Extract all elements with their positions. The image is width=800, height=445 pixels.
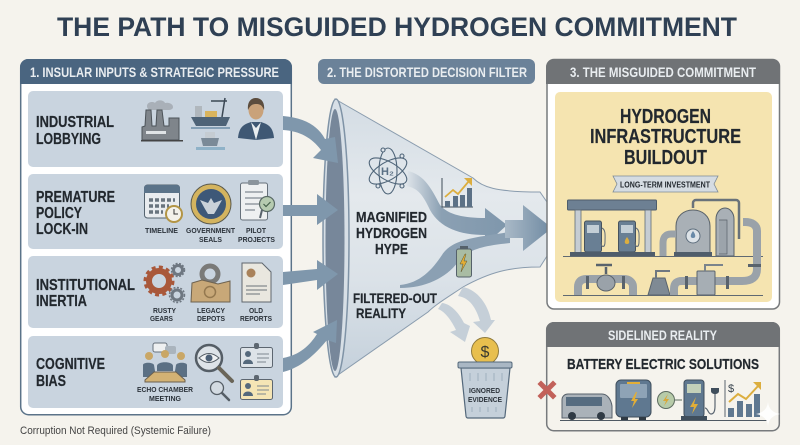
footer note: Corruption Not Required (Systemic Failure): [20, 425, 211, 437]
row: industrial lobbying: INDUSTRIAL: [36, 114, 114, 131]
panel: insular inputs: [20, 59, 292, 415]
icon: hydrogen atom: H₂: [381, 166, 394, 178]
label: filtered-out reality: FILTERED-OUT: [353, 290, 437, 306]
label: rusty gears: GEARS: [150, 314, 173, 323]
header: decision filter: 2. THE DISTORTED DECISION FILTER: [327, 64, 527, 80]
icon: legacy depot: [191, 266, 230, 302]
heading: battery electric solutions: BATTERY ELECTRIC SOLUTIONS: [567, 356, 759, 373]
row: cognitive bias: BIAS: [36, 373, 66, 390]
panel 1 header: 1. INSULAR INPUTS & STRATEGIC PRESSURE: [30, 64, 279, 80]
label: rusty gears: RUSTY: [153, 306, 176, 315]
row: premature policy lock-in: [28, 174, 283, 249]
row: premature policy lock-in: POLICY: [36, 205, 82, 222]
funnel mouth: [323, 99, 349, 377]
icon: businessman: [238, 98, 274, 140]
icon: bus side: [562, 394, 612, 420]
row: industrial lobbying: [28, 91, 283, 167]
icon: charging station: [681, 380, 719, 420]
icon: battery: [456, 246, 472, 277]
icon: calendar: [144, 185, 182, 222]
label: old reports: OLD: [249, 306, 264, 315]
label: filtered-out reality: REALITY: [356, 305, 407, 321]
icon: cargo ship: [191, 98, 230, 128]
panel 1 header: [20, 59, 292, 84]
icon: rising chart: [442, 178, 473, 207]
row: industrial lobbying: LOBBYING: [36, 131, 101, 148]
banner: long-term investment: LONG-TERM INVESTMENT: [620, 180, 710, 190]
icon: rusty gears: [145, 264, 184, 302]
icon: small magnifier: [210, 382, 229, 400]
ground line lower: [563, 294, 763, 296]
row: institutional inertia: INSTITUTIONAL: [36, 277, 135, 294]
banner: long-term investment: [613, 176, 718, 192]
icon: ignored evidence bin: EVIDENCE: [468, 395, 502, 404]
icon: red cross: [541, 384, 553, 396]
icon: ignored evidence bin: IGNORED: [469, 386, 501, 395]
icon: storage tanks: [663, 200, 739, 256]
icon: dollar coin: [472, 338, 498, 364]
ground line upper: [563, 256, 763, 258]
row: institutional inertia: [28, 256, 283, 328]
icon: sparkle: [756, 402, 780, 426]
label: magnified hydrogen hype: HYPE: [375, 241, 408, 258]
arrow: industrial lobbying to funnel: [283, 116, 338, 163]
label: echo chamber meeting: ECHO CHAMBER: [137, 385, 194, 394]
icon: factory: [141, 100, 183, 142]
arrow: inertia to funnel: [283, 260, 338, 290]
arrow: hype stream lower: [400, 232, 510, 288]
row: cognitive bias: COGNITIVE: [36, 356, 105, 373]
panel 3 header: 3. THE MISGUIDED COMMITMENT: [570, 64, 756, 80]
row: premature policy lock-in: PREMATURE: [36, 189, 115, 206]
row: institutional inertia: INERTIA: [36, 293, 87, 310]
yellow infrastructure card: INFRASTRUCTURE: [590, 126, 741, 148]
header: decision filter: [318, 59, 535, 84]
label: pilot projects: PROJECTS: [238, 235, 275, 244]
icon: government seal: [191, 184, 231, 224]
label: magnified hydrogen hype: MAGNIFIED: [356, 209, 427, 226]
label: legacy depots: LEGACY: [197, 306, 225, 315]
label: pilot projects: PILOT: [246, 226, 266, 235]
icon: old report: [242, 263, 271, 302]
arrow: filtered out left: [438, 303, 470, 342]
arrow: output head: [505, 205, 552, 251]
panel: misguided commitment: [546, 59, 780, 309]
panel 3 header: [546, 59, 780, 84]
icon: dollar coin: $: [481, 344, 490, 361]
arrow: filtered out right: [458, 287, 495, 333]
label: old reports: REPORTS: [240, 314, 272, 323]
icon: magnifier with eye: [196, 345, 232, 381]
row: premature policy lock-in: LOCK-IN: [36, 221, 88, 238]
icon: id badge: [240, 343, 272, 368]
sidelined header: [546, 322, 780, 347]
label: legacy depots: DEPOTS: [197, 314, 225, 323]
row: cognitive bias: [28, 336, 283, 408]
icon: charge symbol: [658, 392, 682, 408]
icon: small ship: [196, 132, 225, 150]
icon: clipboard: [240, 180, 274, 220]
sidelined header: SIDELINED REALITY: [608, 327, 718, 343]
icon: fuel station: [568, 200, 656, 256]
arrow: policy to funnel: [283, 194, 338, 225]
label: government seals: GOVERNMENT: [186, 226, 235, 235]
arrow: bias to funnel: [283, 320, 337, 372]
icon: hydrogen atom: [365, 148, 411, 194]
arrow: hype stream upper: [406, 171, 507, 245]
yellow infrastructure card: [555, 92, 772, 302]
label: timeline: TIMELINE: [145, 226, 178, 235]
icon: growth chart: $: [728, 383, 734, 395]
ground line: [560, 420, 767, 422]
icon: yellow id badge: [240, 375, 272, 400]
label: echo chamber meeting: MEETING: [149, 394, 181, 403]
icon: pipes and valves: [578, 222, 761, 295]
panel: sidelined reality: [546, 322, 780, 431]
label: magnified hydrogen hype: HYDROGEN: [356, 225, 427, 242]
icon: echo chamber meeting: [143, 343, 187, 382]
label: government seals: SEALS: [199, 235, 222, 244]
icon: bus front: [616, 380, 651, 421]
funnel: [323, 99, 565, 377]
icon: ignored evidence bin: [458, 362, 512, 418]
yellow infrastructure card: BUILDOUT: [624, 147, 707, 169]
icon: growth chart: [725, 380, 761, 417]
title: THE PATH TO MISGUIDED HYDROGEN COMMITMENT: [57, 12, 737, 42]
yellow infrastructure card: HYDROGEN: [620, 106, 711, 128]
